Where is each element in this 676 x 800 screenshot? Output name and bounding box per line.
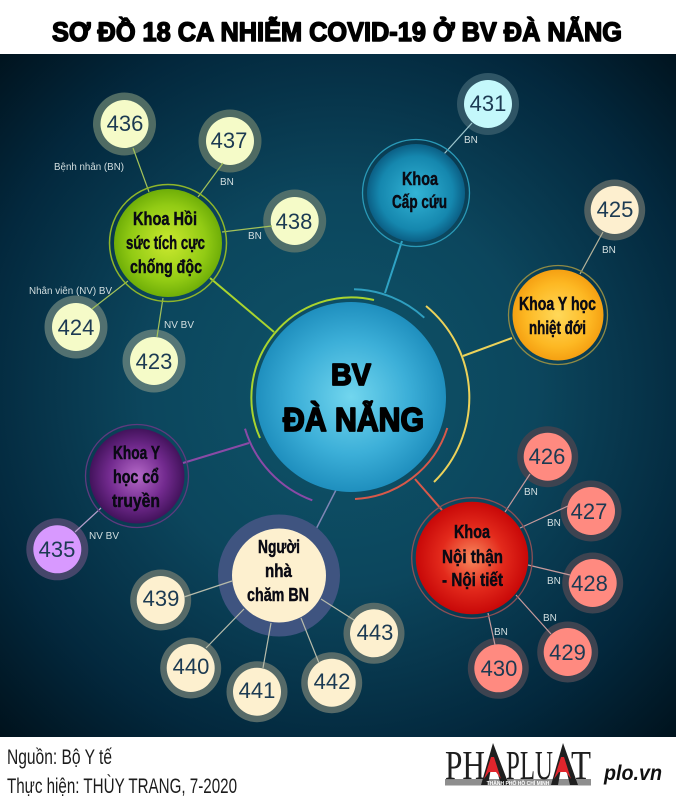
case 443: 443 [357, 620, 393, 645]
logo: Pháp Luật: PH [445, 742, 485, 788]
case 441 [226, 661, 288, 722]
case 428 [562, 552, 623, 614]
logo: Pháp Luật: THÀNH PHỐ HỒ CHÍ MINH [487, 779, 550, 787]
labels: BN [494, 627, 508, 638]
case 423: 423 [136, 349, 172, 374]
family label: Người [258, 537, 300, 557]
case 430 [468, 638, 529, 699]
arc: yellow [426, 306, 469, 482]
labels: Nhân viên (NV) BV [29, 286, 112, 297]
department name: Khoa Y [113, 443, 160, 463]
case 438 [263, 190, 326, 252]
labels: BN [543, 613, 557, 624]
label: NV BV [89, 531, 119, 542]
case 425 [584, 180, 645, 240]
case 441: 441 [239, 678, 275, 703]
case 430: 430 [481, 656, 517, 681]
group: Khoa Y học nhiệt đới [508, 180, 645, 364]
case 439 [130, 570, 191, 630]
connector [580, 232, 603, 274]
family label [247, 537, 309, 605]
connector [444, 123, 472, 154]
case 427: 427 [571, 499, 607, 524]
department name: chống độc [130, 257, 202, 277]
department name: Cấp cứu [392, 192, 447, 212]
case 439: 439 [143, 586, 179, 611]
department circle [110, 184, 226, 302]
source note: Nguồn: Bộ Y tế [7, 746, 112, 769]
labels: NV BV [164, 320, 194, 331]
case 431 [457, 73, 519, 135]
heading: BV: BV [331, 357, 371, 392]
case 429: 429 [549, 640, 586, 665]
case 437: 437 [211, 128, 247, 153]
group: BV Đà Nẵng hub [183, 241, 512, 539]
labels: BN [524, 487, 538, 498]
arc: purple [245, 429, 312, 500]
case 442: 442 [314, 669, 350, 694]
label: BN [602, 245, 616, 256]
department name: học cổ [113, 467, 159, 487]
labels [494, 487, 561, 638]
logo: Pháp Luật: PLU [506, 742, 553, 788]
case 429 [537, 622, 598, 682]
department circle [412, 498, 532, 618]
connectors [488, 474, 570, 645]
case 440: 440 [173, 654, 209, 679]
department name: Khoa Hồi [133, 209, 197, 229]
department name [126, 209, 205, 277]
case 426 [517, 426, 578, 487]
case 424 [44, 296, 108, 358]
case 438: 438 [276, 209, 312, 234]
case 437 [198, 110, 262, 172]
case 426: 426 [529, 444, 565, 469]
arc: blue [354, 289, 424, 318]
department name: Khoa Y học [519, 294, 596, 314]
department name: truyền [112, 491, 160, 511]
connectors [92, 148, 272, 337]
department name [112, 443, 160, 511]
group: Khoa Nội thận - Nội tiết [412, 426, 623, 699]
case 424: 424 [58, 315, 94, 340]
department circle [508, 266, 608, 364]
label: BN [464, 135, 478, 146]
department name: Nội thận [442, 547, 503, 567]
group: Người nhà chăm BN [130, 514, 404, 722]
central circle [256, 302, 446, 492]
case 443 [344, 603, 404, 664]
group: Khoa Y học cổ truyền [26, 424, 188, 580]
title: SƠ ĐỒ 18 CA NHIỄM COVID-19 Ở BV ĐÀ NẴNG [52, 15, 622, 47]
credit note: Thực hiện: THÙY TRANG, 7-2020 [7, 775, 237, 798]
connectors [184, 581, 354, 668]
department name [442, 522, 503, 590]
case 431: 431 [470, 91, 506, 116]
department name: Khoa [454, 522, 491, 542]
family outer ring [218, 514, 340, 636]
department name: - Nội tiết [442, 570, 503, 590]
labels [29, 162, 262, 331]
family label: nhà [265, 561, 293, 581]
labels: BN [547, 518, 561, 529]
case 440 [160, 638, 221, 698]
logo: Pháp Luật: T [571, 742, 591, 788]
department name [519, 294, 596, 338]
case 436 [93, 92, 156, 156]
case 427 [560, 480, 622, 542]
logo: plo.vn: plo.vn [603, 762, 662, 785]
labels: Bệnh nhân (BN) [54, 162, 124, 173]
case 425: 425 [597, 197, 633, 222]
connector: hub to departments [183, 241, 512, 539]
case 435: 435 [39, 537, 75, 562]
case 442 [301, 652, 362, 713]
group: Khoa Cấp cứu [362, 73, 519, 246]
family label: chăm BN [247, 585, 309, 605]
arc: green [251, 297, 374, 438]
case 436: 436 [107, 111, 143, 136]
department name [392, 169, 447, 212]
heading: Đà Nẵng: ĐÀ NẴNG [283, 401, 424, 438]
case 435 [26, 518, 88, 580]
connector [75, 508, 101, 532]
labels: BN [547, 576, 561, 587]
case 428: 428 [571, 571, 608, 596]
logo: Pháp Luật [445, 742, 591, 788]
department name: sức tích cực [126, 233, 205, 253]
case 423 [122, 330, 186, 392]
group: Khoa Hồi sức tích cực chống độc [29, 92, 326, 392]
family circle [232, 528, 326, 622]
labels: BN [220, 177, 234, 188]
labels: BN [248, 231, 262, 242]
arc: red [355, 428, 447, 499]
department name: nhiệt đới [529, 318, 586, 338]
department circle [362, 140, 470, 246]
department circle [86, 424, 188, 528]
department name: Khoa [402, 169, 439, 189]
